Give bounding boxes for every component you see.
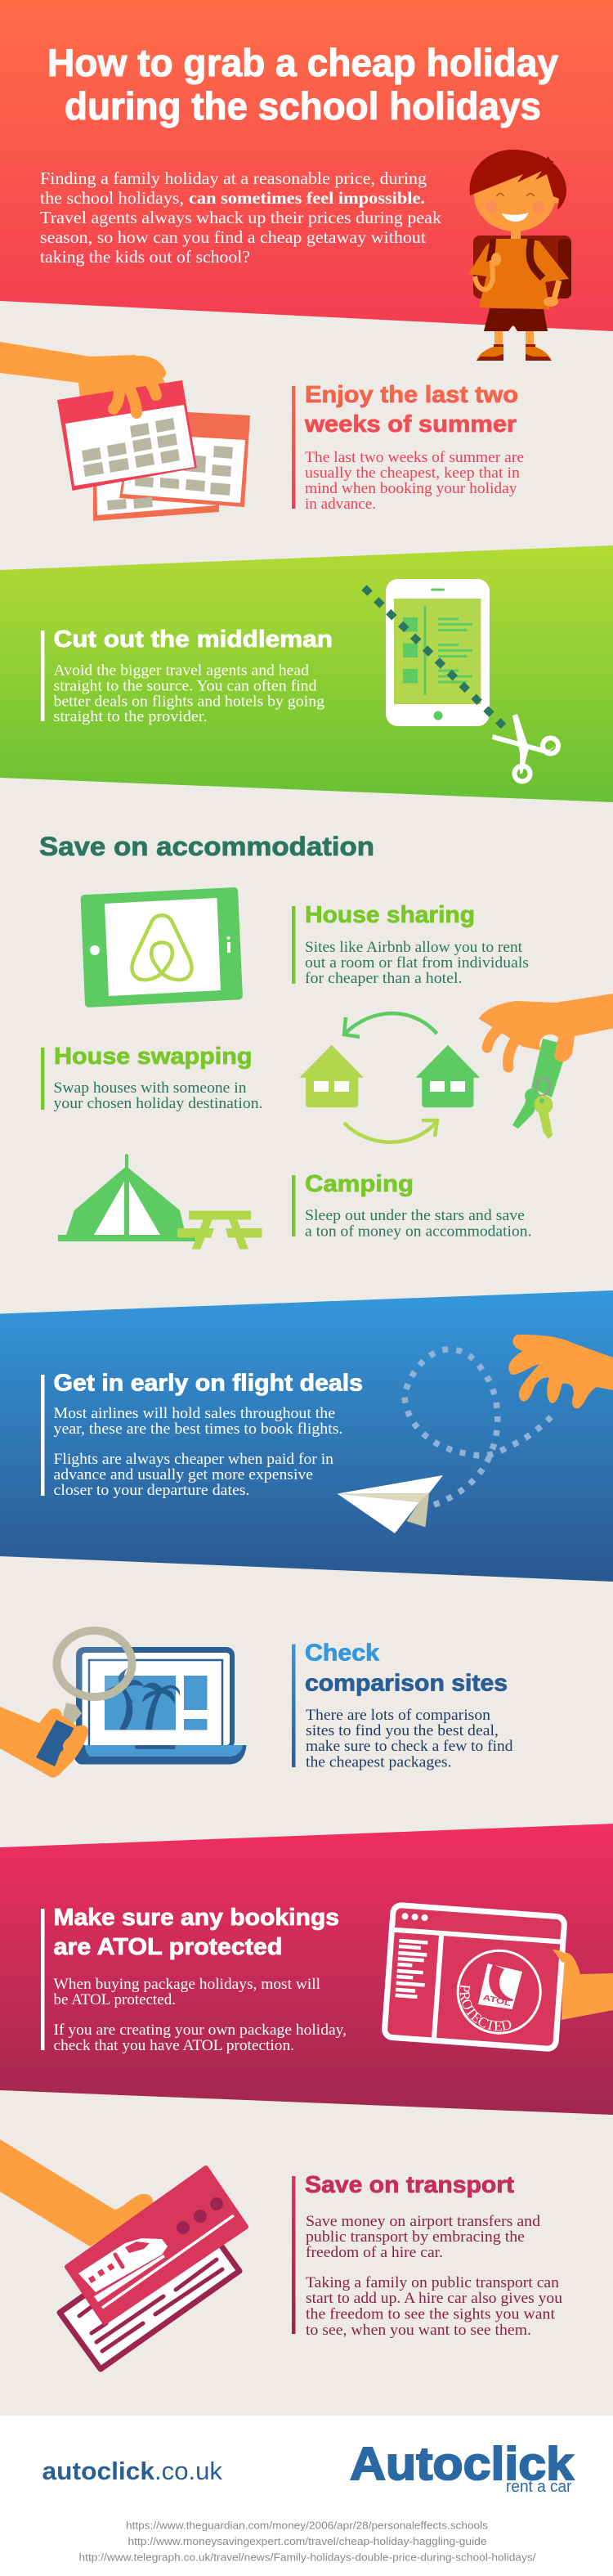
accent bar — [292, 1644, 296, 1767]
source links: http://www.telegraph.co.uk/travel/news/Family-holidays-double-price-during-school-holidays/ — [78, 2551, 536, 2563]
icon: browser window with ATOL stamp — [382, 1902, 567, 2052]
heading: Enjoy the last two — [305, 382, 518, 408]
heading: weeks of summer — [304, 411, 517, 438]
body text — [54, 662, 324, 725]
body text: make sure to check a few to find — [306, 1739, 513, 1755]
intro text: the school holidays, — [40, 188, 184, 208]
section: check comparison sites — [0, 1631, 513, 1778]
logo: Autoclick rent a car: Autoclick — [350, 2438, 574, 2490]
body text: check that you have ATOL protection. — [54, 2038, 294, 2054]
panel: ATOL protected — [0, 1824, 613, 2115]
icon: browser window with ATOL stamp: PROTECTED — [459, 1984, 512, 2031]
icon: hand holding calendars — [0, 342, 250, 521]
heading: House sharing — [305, 902, 475, 928]
icon: dashed flight path — [405, 1349, 553, 1505]
source links: https://www.theguardian.com/money/2006/apr/28/personaleffects.schools — [126, 2519, 489, 2532]
accent bar — [41, 1048, 44, 1110]
website address: .co.uk — [154, 2457, 222, 2485]
section: last two weeks of summer — [0, 342, 524, 521]
heading: Cut out the middleman — [54, 626, 333, 653]
body text: There are lots of comparison — [306, 1708, 490, 1724]
body text: sites to find you the best deal, — [306, 1723, 499, 1739]
body text: straight to the source. You can often find — [54, 679, 317, 695]
body text — [305, 450, 524, 513]
body text: When buying package holidays, most will — [54, 1977, 320, 1993]
body text: The last two weeks of summer are — [305, 450, 524, 466]
intro text: Travel agents always whack up their prices during peak — [40, 208, 442, 227]
heading: comparison sites — [305, 1670, 508, 1696]
icon: browser window with ATOL stamp: ATOL — [482, 1993, 512, 2008]
body text — [305, 1208, 531, 1240]
body text: for cheaper than a hotel. — [305, 971, 463, 987]
body text: the cheapest packages. — [306, 1755, 451, 1771]
intro text — [40, 168, 442, 267]
source links — [78, 2519, 536, 2563]
body text: Taking a family on public transport can — [306, 2275, 559, 2291]
body text: a ton of money on accommodation. — [305, 1223, 531, 1240]
body text: Swap houses with someone in — [54, 1080, 247, 1097]
intro text: season, so how can you find a cheap getaway without — [40, 227, 426, 247]
section: house sharing — [84, 891, 529, 1003]
body text: better deals on flights and hotels by going — [54, 693, 324, 710]
heading: Camping — [305, 1171, 414, 1197]
accent bar — [292, 386, 296, 509]
body text: in advance. — [305, 496, 376, 513]
icon: tent and picnic table — [58, 1154, 262, 1250]
body text — [54, 1406, 343, 1499]
icon: smiling boy with backpack — [468, 150, 571, 361]
body text: Most airlines will hold sales throughout the — [54, 1406, 335, 1422]
panel: hero header — [0, 0, 613, 331]
accent bar — [292, 2176, 296, 2334]
accent bar — [41, 1375, 44, 1496]
icon: hand holding browser — [562, 1953, 613, 2020]
body text: out a room or flat from individuals — [305, 955, 529, 972]
section heading: save on accommodation: Save on accommodation — [39, 832, 374, 861]
icon: hand releasing plane — [508, 1335, 613, 1408]
icon: paper plane — [337, 1475, 443, 1533]
heading: Save on transport — [305, 2172, 514, 2198]
body text — [306, 2214, 562, 2339]
body text: your chosen holiday destination. — [54, 1096, 263, 1112]
heading — [304, 382, 518, 438]
website address — [43, 2457, 222, 2485]
body text: start to add up. A hire car also gives you — [306, 2291, 562, 2307]
body text: be ATOL protected. — [54, 1992, 176, 2008]
body text: Flights are always cheaper when paid for in — [54, 1452, 333, 1468]
intro text: taking the kids out of school? — [40, 247, 250, 267]
heading: are ATOL protected — [54, 1934, 283, 1960]
body text: usually the cheapest, keep that in — [305, 465, 520, 482]
heading — [54, 1905, 339, 1960]
heading — [305, 1640, 508, 1696]
icon: hand holding train tickets — [0, 2139, 246, 2369]
icon: phone being cut by scissors — [365, 579, 558, 782]
body text: straight to the provider. — [54, 709, 208, 725]
body text: Sites like Airbnb allow you to rent — [305, 940, 523, 956]
section: camping — [58, 1154, 531, 1250]
logo: Autoclick rent a car: rent a car — [506, 2478, 572, 2496]
body text: Save money on airport transfers and — [306, 2214, 541, 2230]
body text: advance and usually get more expensive — [54, 1467, 313, 1483]
panel: get in early on flight deals — [0, 1290, 613, 1582]
body text: If you are creating your own package holiday, — [54, 2022, 347, 2039]
icon: laptop with magnifying glass — [0, 1631, 247, 1778]
body text: freedom of a hire car. — [306, 2245, 443, 2261]
accent bar — [41, 1909, 44, 2050]
icon: two houses with swap arrows — [301, 1013, 479, 1142]
body text: closer to your departure dates. — [54, 1483, 250, 1499]
intro text: can sometimes feel impossible. — [189, 188, 425, 208]
body text: public transport by embracing the — [306, 2229, 525, 2246]
title — [47, 41, 558, 128]
panel: footer — [0, 2416, 613, 2576]
section: save on transport — [0, 2139, 562, 2369]
body text: the freedom to see the sights you want — [306, 2306, 556, 2322]
body text: Avoid the bigger travel agents and head — [54, 662, 310, 679]
body text — [305, 940, 529, 987]
website address: autoclick — [43, 2457, 155, 2485]
title: during the school holidays — [65, 84, 541, 128]
accent bar — [41, 631, 44, 721]
section: house swapping — [41, 994, 613, 1142]
heading: Get in early on flight deals — [54, 1371, 363, 1397]
heading: Make sure any bookings — [54, 1905, 339, 1931]
panel: cut out the middleman — [0, 545, 613, 802]
accent bar — [292, 906, 296, 984]
body text — [54, 1080, 263, 1112]
icon: tablet with Airbnb logo — [84, 891, 239, 1003]
source links: http://www.moneysavingexpert.com/travel/cheap-holiday-haggling-guide — [128, 2535, 487, 2547]
title: How to grab a cheap holiday — [47, 41, 558, 84]
body text: to see, when you want to see them. — [306, 2322, 531, 2339]
heading: Check — [305, 1640, 380, 1667]
body text — [306, 1708, 513, 1771]
intro text: Finding a family holiday at a reasonable price, during — [40, 168, 427, 188]
body text — [54, 1977, 347, 2054]
body text: Sleep out under the stars and save — [305, 1208, 525, 1224]
accent bar — [292, 1175, 296, 1236]
body text: mind when booking your holiday — [305, 481, 517, 497]
heading: House swapping — [54, 1043, 252, 1070]
icon: hand holding keys — [479, 994, 613, 1139]
body text: year, these are the best times to book flights. — [54, 1421, 343, 1438]
